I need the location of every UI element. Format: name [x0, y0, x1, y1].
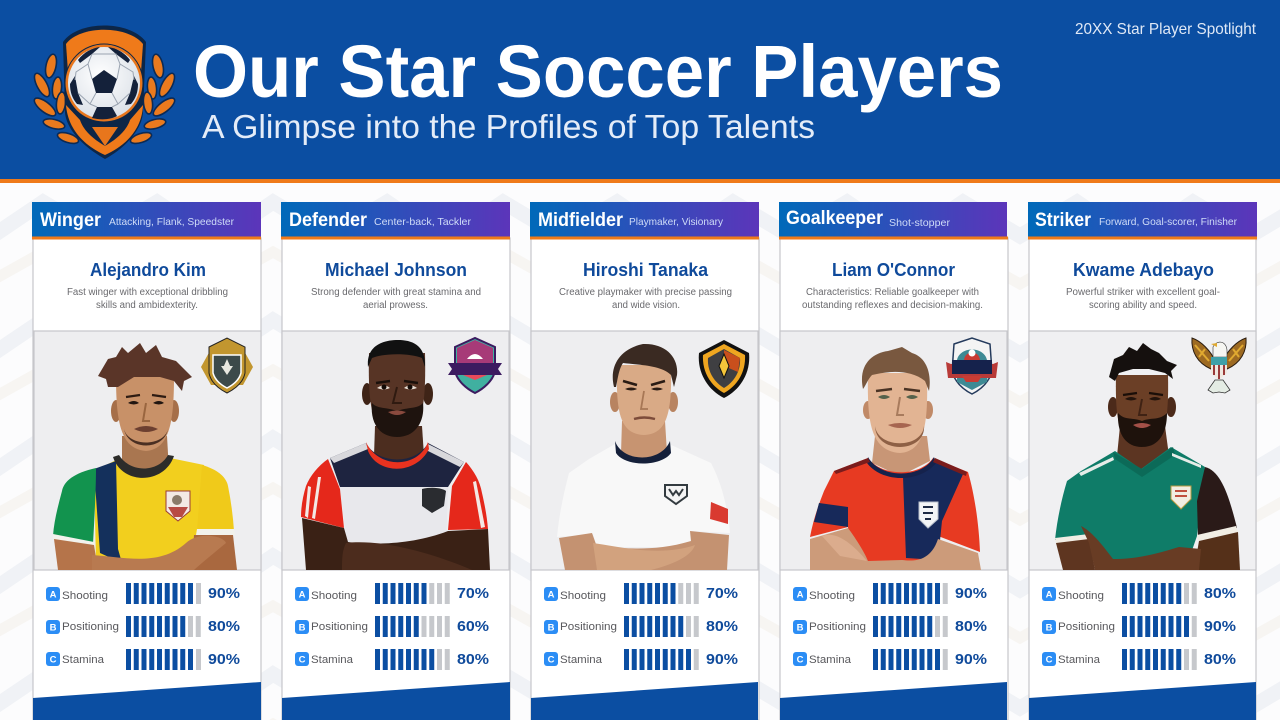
role header: Striker — [1028, 202, 1257, 240]
role header: Winger: Winger — [40, 210, 102, 231]
role header: Midfielder: Playmaker, Visionary — [629, 216, 724, 228]
skill stats: Hiroshi Tanaka: Shooting — [560, 590, 606, 602]
role header: Winger — [32, 202, 261, 240]
panel: Goalkeeper card — [779, 202, 1008, 720]
player name: Kwame Adebayo: Kwame Adebayo — [1073, 260, 1214, 280]
skill stats: Hiroshi Tanaka: 70% — [706, 585, 738, 602]
role header: Defender: Center-back, Tackler — [374, 216, 471, 228]
role header: Goalkeeper: Goalkeeper — [786, 208, 884, 229]
skill stats: Liam O'Connor: C — [797, 654, 804, 666]
skill stats: Alejandro Kim: Stamina — [62, 654, 105, 666]
skill stats: Kwame Adebayo: 80% — [1204, 585, 1236, 602]
skill stats: Kwame Adebayo: B — [1046, 622, 1053, 634]
description: Hiroshi Tanaka: and wide vision. — [612, 300, 680, 311]
role header: Defender: Defender — [289, 210, 368, 231]
role header: Striker: Striker — [1035, 210, 1092, 231]
skill stats: Kwame Adebayo: Shooting — [1058, 590, 1104, 602]
skill stats: Kwame Adebayo: C — [1046, 654, 1053, 666]
skill stats: Liam O'Connor: Shooting — [809, 590, 855, 602]
footer wedge — [780, 682, 1007, 720]
skill stats: Kwame Adebayo: 90% — [1204, 618, 1236, 635]
description: Kwame Adebayo — [1066, 287, 1220, 311]
skill stats: Alejandro Kim: Shooting — [62, 590, 108, 602]
skill stats: Liam O'Connor: A — [797, 590, 804, 600]
description: Alejandro Kim — [67, 287, 228, 311]
skill stats: Michael Johnson: 80% — [457, 651, 489, 668]
skill stats: Michael Johnson: Stamina — [311, 654, 354, 666]
skill stats: Hiroshi Tanaka: B — [548, 622, 555, 634]
description: Kwame Adebayo: scoring ability and speed. — [1089, 300, 1197, 311]
player name: Michael Johnson: Michael Johnson — [325, 260, 467, 280]
skill stats: Kwame Adebayo: 80% — [1204, 651, 1236, 668]
skill stats: Michael Johnson: C — [299, 654, 306, 666]
skill stats: Alejandro Kim: A — [50, 590, 57, 600]
icon: soccer crest logo — [31, 26, 178, 159]
header tag: 20XX Star Player Spotlight — [1075, 21, 1257, 38]
skill stats: Kwame Adebayo: A — [1046, 590, 1053, 600]
skill stats: Hiroshi Tanaka: 90% — [706, 651, 738, 668]
skill stats: Michael Johnson — [295, 585, 489, 668]
icon: team crest — [448, 338, 502, 393]
player name: Liam O'Connor: Liam O'Connor — [832, 260, 955, 280]
player photo: Alejandro Kim — [34, 331, 261, 570]
description: Michael Johnson: aerial prowess. — [363, 300, 428, 311]
skill stats: Liam O'Connor: 90% — [955, 651, 987, 668]
skill stats: Kwame Adebayo: Stamina — [1058, 654, 1101, 666]
skill stats: Michael Johnson: 60% — [457, 618, 489, 635]
panel: Midfielder card — [530, 202, 759, 720]
skill stats: Liam O'Connor: B — [797, 622, 804, 634]
skill stats: Alejandro Kim: 80% — [208, 618, 240, 635]
player name: Alejandro Kim: Alejandro Kim — [90, 260, 206, 280]
skill stats: Hiroshi Tanaka: Positioning — [560, 621, 617, 633]
role header: Midfielder — [530, 202, 759, 240]
description: Alejandro Kim: skills and ambidexterity. — [96, 300, 198, 311]
player photo: Kwame Adebayo — [1029, 331, 1256, 570]
player name: Hiroshi Tanaka: Hiroshi Tanaka — [583, 260, 709, 280]
player photo: Michael Johnson — [282, 331, 509, 570]
player photo: Hiroshi Tanaka — [531, 331, 758, 570]
skill stats: Liam O'Connor: 90% — [955, 585, 987, 602]
skill stats: Alejandro Kim — [46, 585, 240, 668]
panel: Striker card — [1028, 202, 1257, 720]
skill stats: Hiroshi Tanaka: C — [548, 654, 555, 666]
title: Our Star Soccer Players — [193, 30, 1003, 113]
skill stats: Liam O'Connor — [793, 585, 987, 668]
description: Kwame Adebayo: Powerful striker with excellent goal- — [1066, 287, 1220, 298]
description: Michael Johnson: Strong defender with great stamina and — [311, 287, 481, 298]
subtitle: A Glimpse into the Profiles of Top Talents — [202, 108, 815, 145]
skill stats: Michael Johnson: A — [299, 590, 306, 600]
description: Michael Johnson — [311, 287, 481, 311]
role header: Striker: Forward, Goal-scorer, Finisher — [1099, 216, 1237, 228]
skill stats: Hiroshi Tanaka: 80% — [706, 618, 738, 635]
role header: Goalkeeper — [779, 202, 1008, 240]
skill stats: Kwame Adebayo: Positioning — [1058, 621, 1115, 633]
skill stats: Michael Johnson: 70% — [457, 585, 489, 602]
skill stats: Alejandro Kim: C — [50, 654, 57, 666]
role header: Defender — [281, 202, 510, 240]
background pattern — [0, 183, 1280, 720]
icon: team crest eagle — [1192, 338, 1246, 393]
description: Hiroshi Tanaka: Creative playmaker with precise passing — [559, 287, 732, 298]
panel: Defender card — [281, 202, 510, 720]
description: Liam O'Connor: Characteristics: Reliable goalkeeper with — [806, 287, 979, 298]
header banner — [0, 0, 1280, 183]
skill stats: Liam O'Connor: 80% — [955, 618, 987, 635]
skill stats: Michael Johnson: Positioning — [311, 621, 368, 633]
skill stats: Hiroshi Tanaka — [544, 585, 738, 668]
role header: Goalkeeper: Shot-stopper — [889, 217, 951, 229]
description: Liam O'Connor — [802, 287, 983, 311]
footer wedge — [282, 682, 510, 720]
skill stats: Alejandro Kim: 90% — [208, 651, 240, 668]
footer wedge — [531, 682, 758, 720]
role header: Winger: Attacking, Flank, Speedster — [109, 216, 234, 228]
panel: Winger card — [32, 202, 261, 720]
icon: team crest — [699, 340, 749, 398]
skill stats: Michael Johnson: B — [299, 622, 306, 634]
skill stats: Liam O'Connor: Stamina — [809, 654, 852, 666]
skill stats: Liam O'Connor: Positioning — [809, 621, 866, 633]
player photo: Liam O'Connor — [780, 331, 1007, 570]
skill stats: Alejandro Kim: Positioning — [62, 621, 119, 633]
description: Liam O'Connor: outstanding reflexes and decision-making. — [802, 300, 983, 311]
icon: team crest — [946, 338, 998, 394]
footer wedge — [1029, 682, 1256, 720]
skill stats: Michael Johnson: Shooting — [311, 590, 357, 602]
description: Hiroshi Tanaka — [559, 287, 732, 311]
icon: team crest — [201, 338, 253, 393]
skill stats: Kwame Adebayo — [1042, 585, 1236, 668]
role header: Midfielder: Midfielder — [538, 210, 624, 231]
footer wedge — [33, 682, 261, 720]
description: Alejandro Kim: Fast winger with exceptional dribbling — [67, 287, 228, 298]
skill stats: Hiroshi Tanaka: Stamina — [560, 654, 603, 666]
skill stats: Alejandro Kim: B — [50, 622, 57, 634]
skill stats: Alejandro Kim: 90% — [208, 585, 240, 602]
skill stats: Hiroshi Tanaka: A — [548, 590, 555, 600]
